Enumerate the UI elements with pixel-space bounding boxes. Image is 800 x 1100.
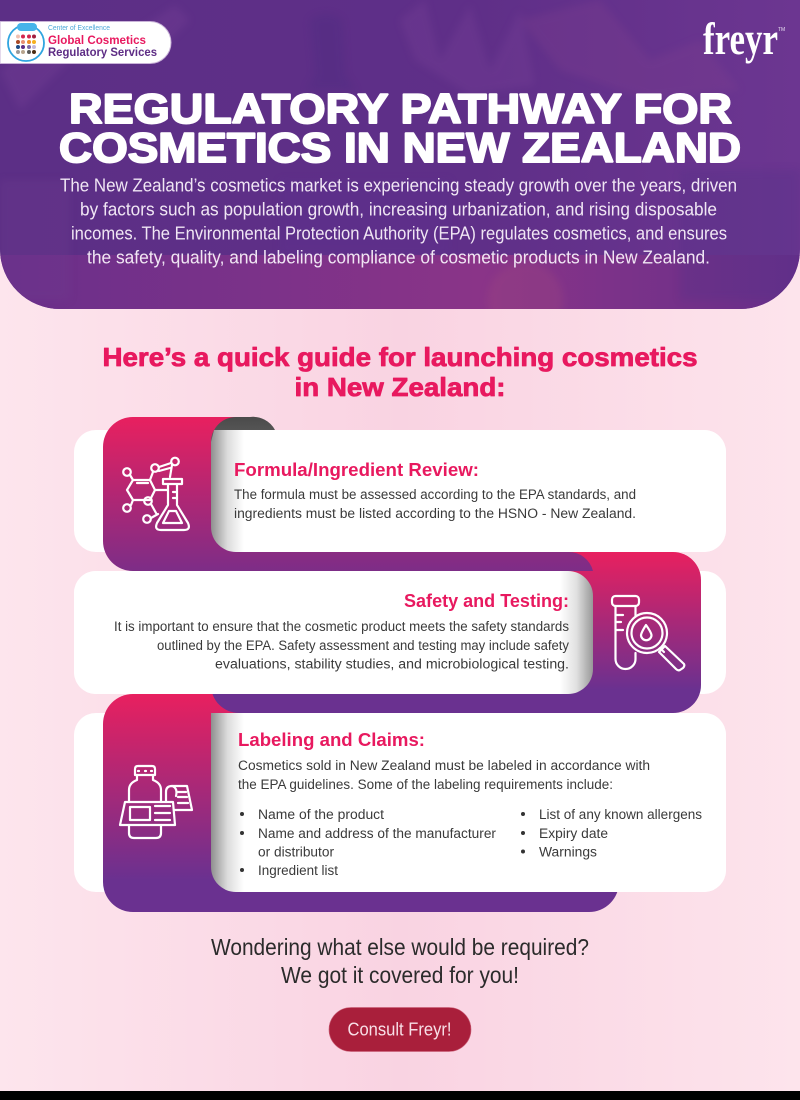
right bullet list [521,807,702,860]
icon: molecule and flask [123,458,189,530]
closing message: Wondering what else would be required? [211,934,589,960]
left bullet list: or distributor [258,844,335,860]
panel: step 2 Safety and Testing: outlined by the EPA. Safety assessment and testing may include safety [157,638,569,653]
icon: bottle with label [120,766,192,838]
badge: Center of Excellence [0,22,171,64]
intro paragraph: The New Zealand’s cosmetics market is experiencing steady growth over the years, driven [60,176,737,196]
left bullet list: Name of the product [258,807,384,822]
intro paragraph [60,176,737,268]
left bullet list: Ingredient list [258,863,338,878]
step 2 gradient block [211,552,701,713]
panel: step 3 Labeling and Claims: Labeling and Claims: [238,729,425,750]
panel: step 3 Labeling and Claims: the EPA guidelines. Some of the labeling requirements include: [238,777,613,792]
closing message [211,934,589,988]
panel: step 2 Safety and Testing [74,571,593,694]
header banner [0,0,800,338]
white card bases [74,430,726,892]
panel: step 3 Labeling and Claims: Cosmetics sold in New Zealand must be labeled in accordance with [238,758,650,773]
intro paragraph: incomes. The Environmental Protection Authority (EPA) regulates cosmetics, and ensures [71,224,727,244]
footer bar [0,1091,800,1100]
right bullet list: Expiry date [539,826,608,841]
button: Consult Freyr [329,1008,471,1052]
panel: step 2 Safety and Testing: Safety and Testing: [404,590,569,611]
badge: Center of Excellence: Global Cosmetics [48,33,146,47]
intro paragraph: the safety, quality, and labeling compliance of cosmetic products in New Zealand. [87,248,710,268]
panel: step 1 Formula/Ingredient Review: The formula must be assessed according to the EPA standards, and [234,487,636,502]
right bullet list: List of any known allergens [539,807,702,822]
right bullet list: Warnings [539,844,597,860]
step 1 gradient block [103,417,593,571]
freyr logo: freyr [703,13,778,64]
panel: step 1 Formula/Ingredient Review: Formula/Ingredient Review: [234,459,479,480]
panel: step 1 Formula/Ingredient Review [211,430,726,552]
button: Consult Freyr: Consult Freyr! [348,1020,452,1040]
title: REGULATORY PATHWAY FOR [69,85,732,132]
step 3 gradient block [103,694,619,912]
section heading [102,342,698,402]
step 1 shadow cap [211,417,275,442]
panel: step 1 Formula/Ingredient Review: ingredients must be listed according to the HSNO - New Zealand. [234,506,636,521]
left bullet list: Name and address of the manufacturer [258,826,496,841]
badge: Center of Excellence: Center of Excellence [48,25,110,32]
title: COSMETICS IN NEW ZEALAND [59,124,741,171]
panel: step 2 Safety and Testing: evaluations, stability studies, and microbiological testing. [215,656,569,672]
left bullet list [240,807,496,878]
section heading: Here’s a quick guide for launching cosmetics [102,342,698,372]
icon: test tube and magnifier [612,596,684,670]
panel: step 2 Safety and Testing: It is important to ensure that the cosmetic product meets the safety standards [114,619,569,634]
closing message: We got it covered for you! [281,962,519,988]
panel: step 3 Labeling and Claims [211,713,726,892]
badge: Center of Excellence: Regulatory Services [48,45,157,59]
freyr logo: TM [778,27,785,33]
intro paragraph: by factors such as population growth, increasing urbanization, and rising disposable [80,200,717,220]
badge icon [8,23,44,61]
section heading: in New Zealand: [294,372,506,402]
title [59,85,741,171]
